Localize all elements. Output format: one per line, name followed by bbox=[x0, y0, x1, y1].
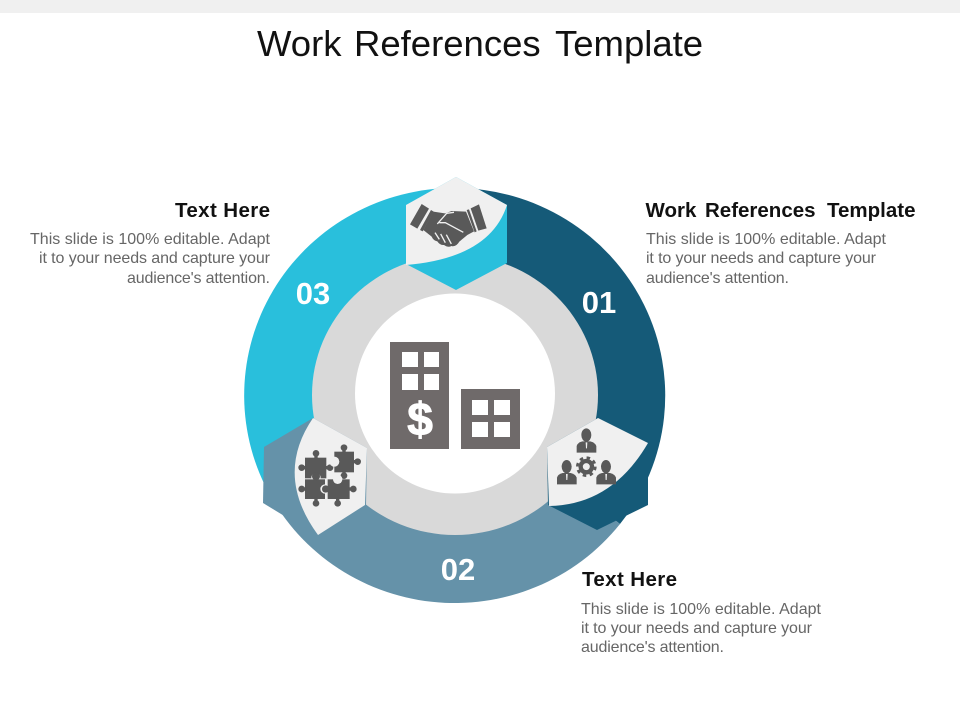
text block: 02: Text Here bbox=[582, 568, 677, 591]
center white circle bbox=[355, 294, 555, 494]
title: References bbox=[354, 23, 541, 64]
left person bbox=[557, 460, 577, 484]
text block: 03 bbox=[30, 199, 271, 287]
title: Template bbox=[555, 23, 703, 64]
right person bbox=[596, 460, 616, 484]
segment 02 arc: mid blue bbox=[265, 396, 620, 603]
text block: 03: Text Here bbox=[175, 199, 270, 222]
icon: puzzle pieces bbox=[298, 444, 361, 507]
icon: office buildings with dollar bbox=[390, 342, 520, 449]
circular diagram bbox=[244, 177, 665, 603]
hexagon: top cyan bbox=[406, 177, 507, 290]
hexagon: left light cap bbox=[295, 418, 367, 535]
text block: 03: This slide is 100% editable. Adapt bbox=[30, 231, 271, 248]
puzzle bottom right bbox=[322, 475, 357, 507]
title: Work bbox=[257, 23, 342, 64]
number 01: 01 bbox=[582, 285, 616, 320]
text block: 01: audience's attention. bbox=[646, 270, 789, 287]
text block: 01: References bbox=[705, 199, 816, 222]
icon: team with gear bbox=[557, 428, 616, 484]
puzzle top left bbox=[298, 450, 333, 482]
segment 01 arc: dark blue bbox=[454, 188, 665, 524]
gear bbox=[577, 458, 595, 476]
text block: 01: Work bbox=[646, 199, 697, 222]
puzzle bottom left bbox=[298, 472, 330, 507]
hexagon: right light cap bbox=[547, 418, 648, 506]
tall building: $ bbox=[407, 393, 433, 445]
text block: 03: audience's attention. bbox=[127, 270, 270, 287]
text block: 02: This slide is 100% editable. Adapt bbox=[581, 601, 822, 618]
text block: 02: it to your needs and capture your bbox=[581, 620, 813, 637]
gray inner ring bbox=[312, 255, 598, 535]
text block: 01: it to your needs and capture your bbox=[646, 250, 877, 267]
small building bbox=[461, 389, 520, 449]
text block: 02: audience's attention. bbox=[581, 639, 724, 656]
hexagon: top light cap bbox=[406, 177, 507, 265]
top person bbox=[577, 428, 596, 453]
hexagon: right dark bbox=[547, 418, 648, 530]
hexagon: left mid blue bbox=[263, 418, 367, 535]
segment 03 arc: cyan bbox=[244, 188, 454, 486]
number 03: 03 bbox=[296, 276, 330, 311]
icon: handshake bbox=[410, 204, 487, 247]
number 02: 02 bbox=[441, 552, 475, 587]
text block: 01 bbox=[646, 199, 915, 287]
puzzle top right bbox=[329, 444, 361, 479]
text block: 01: This slide is 100% editable. Adapt bbox=[646, 231, 887, 248]
text block: 02 bbox=[581, 568, 822, 656]
text block: 01: Template bbox=[827, 199, 915, 222]
text block: 03: it to your needs and capture your bbox=[39, 250, 271, 267]
